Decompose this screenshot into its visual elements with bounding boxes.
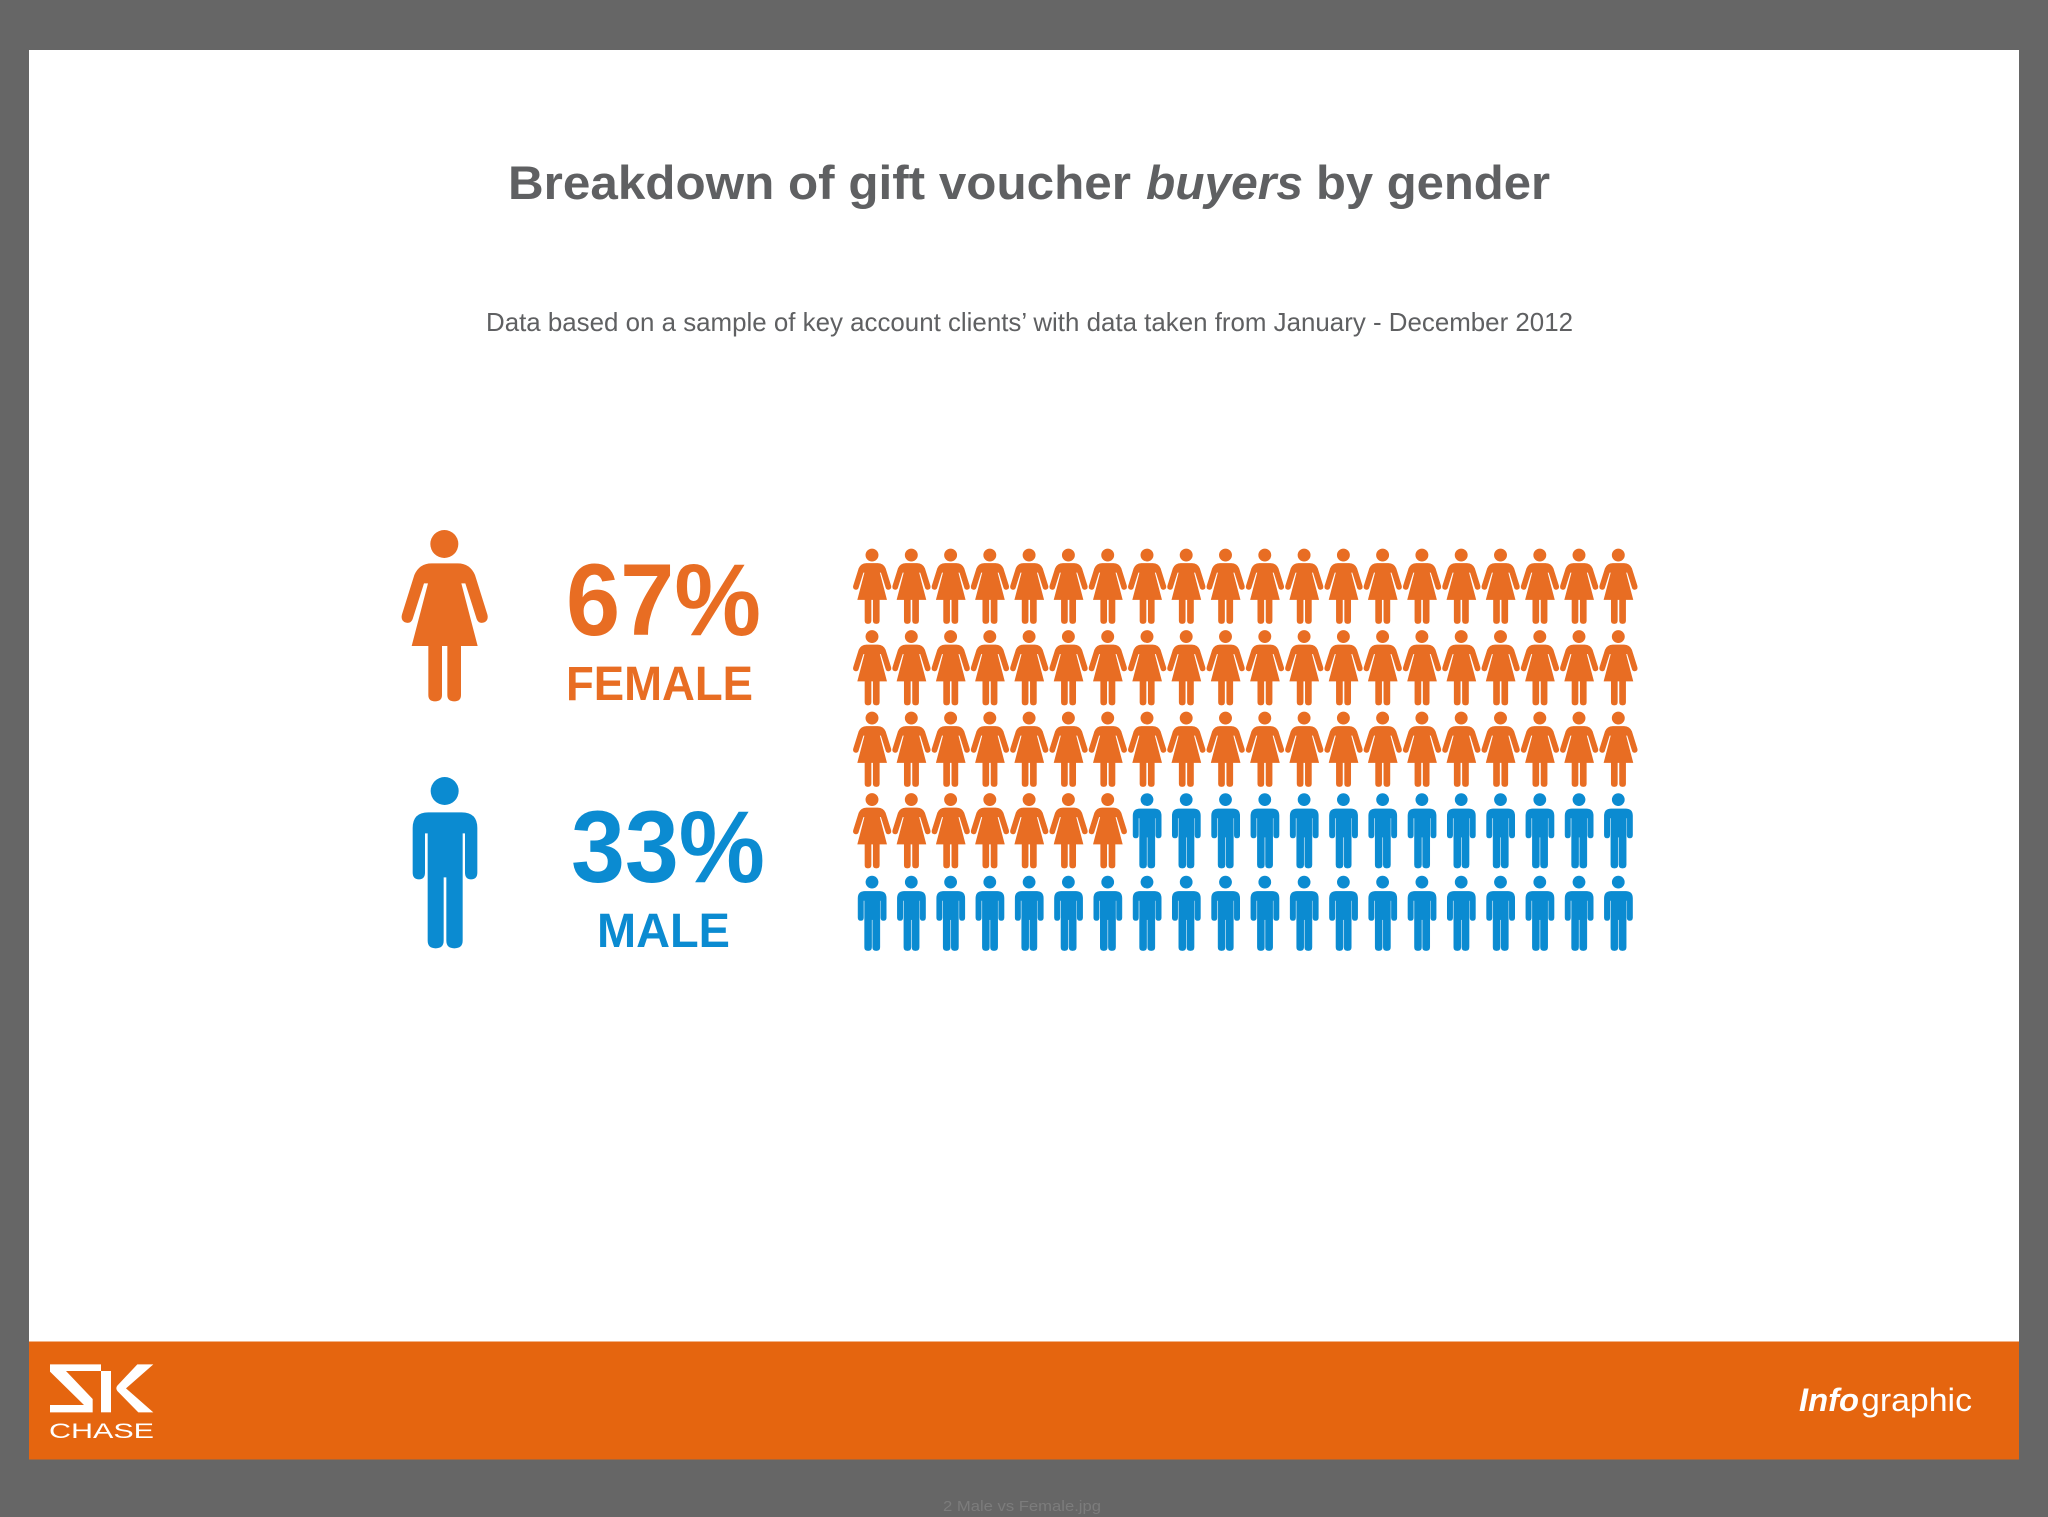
label: male: MALE bbox=[597, 905, 730, 958]
title bbox=[508, 156, 1550, 209]
row 4: 7 female and 13 male figures bbox=[853, 794, 1633, 868]
footer label: Infographic: graphic bbox=[1861, 1382, 1972, 1418]
subtitle: Data based on a sample of key account clients’ with data taken from January - December 2012 bbox=[486, 307, 1573, 337]
icon: large female figure bbox=[402, 530, 488, 701]
footer label: Infographic bbox=[1799, 1382, 1972, 1418]
footer label: Infographic: Info bbox=[1799, 1382, 1859, 1418]
icon: large male figure bbox=[413, 777, 477, 948]
title: Breakdown of gift voucher bbox=[508, 156, 1131, 209]
stat: 33%: 33% bbox=[571, 790, 765, 904]
title: buyers bbox=[1146, 156, 1303, 209]
footer bar bbox=[29, 1342, 2019, 1460]
row 5: 20 male figures bbox=[858, 876, 1633, 951]
row 3: 20 female figures bbox=[853, 712, 1637, 787]
title: by gender bbox=[1316, 156, 1550, 209]
pictogram chart: 67 female and 33 male figures bbox=[853, 549, 1637, 951]
stat: 67%: 67% bbox=[566, 543, 761, 657]
label: female: FEMALE bbox=[566, 658, 753, 711]
row 1: 20 female figures bbox=[853, 549, 1637, 624]
logo: SK Chase bbox=[49, 1364, 154, 1443]
row 2: 20 female figures bbox=[853, 630, 1637, 705]
file name caption: 2 Male vs Female.jpg bbox=[943, 1498, 1101, 1515]
logo wordmark: CHASE bbox=[49, 1420, 154, 1443]
logo mark bbox=[50, 1364, 153, 1412]
